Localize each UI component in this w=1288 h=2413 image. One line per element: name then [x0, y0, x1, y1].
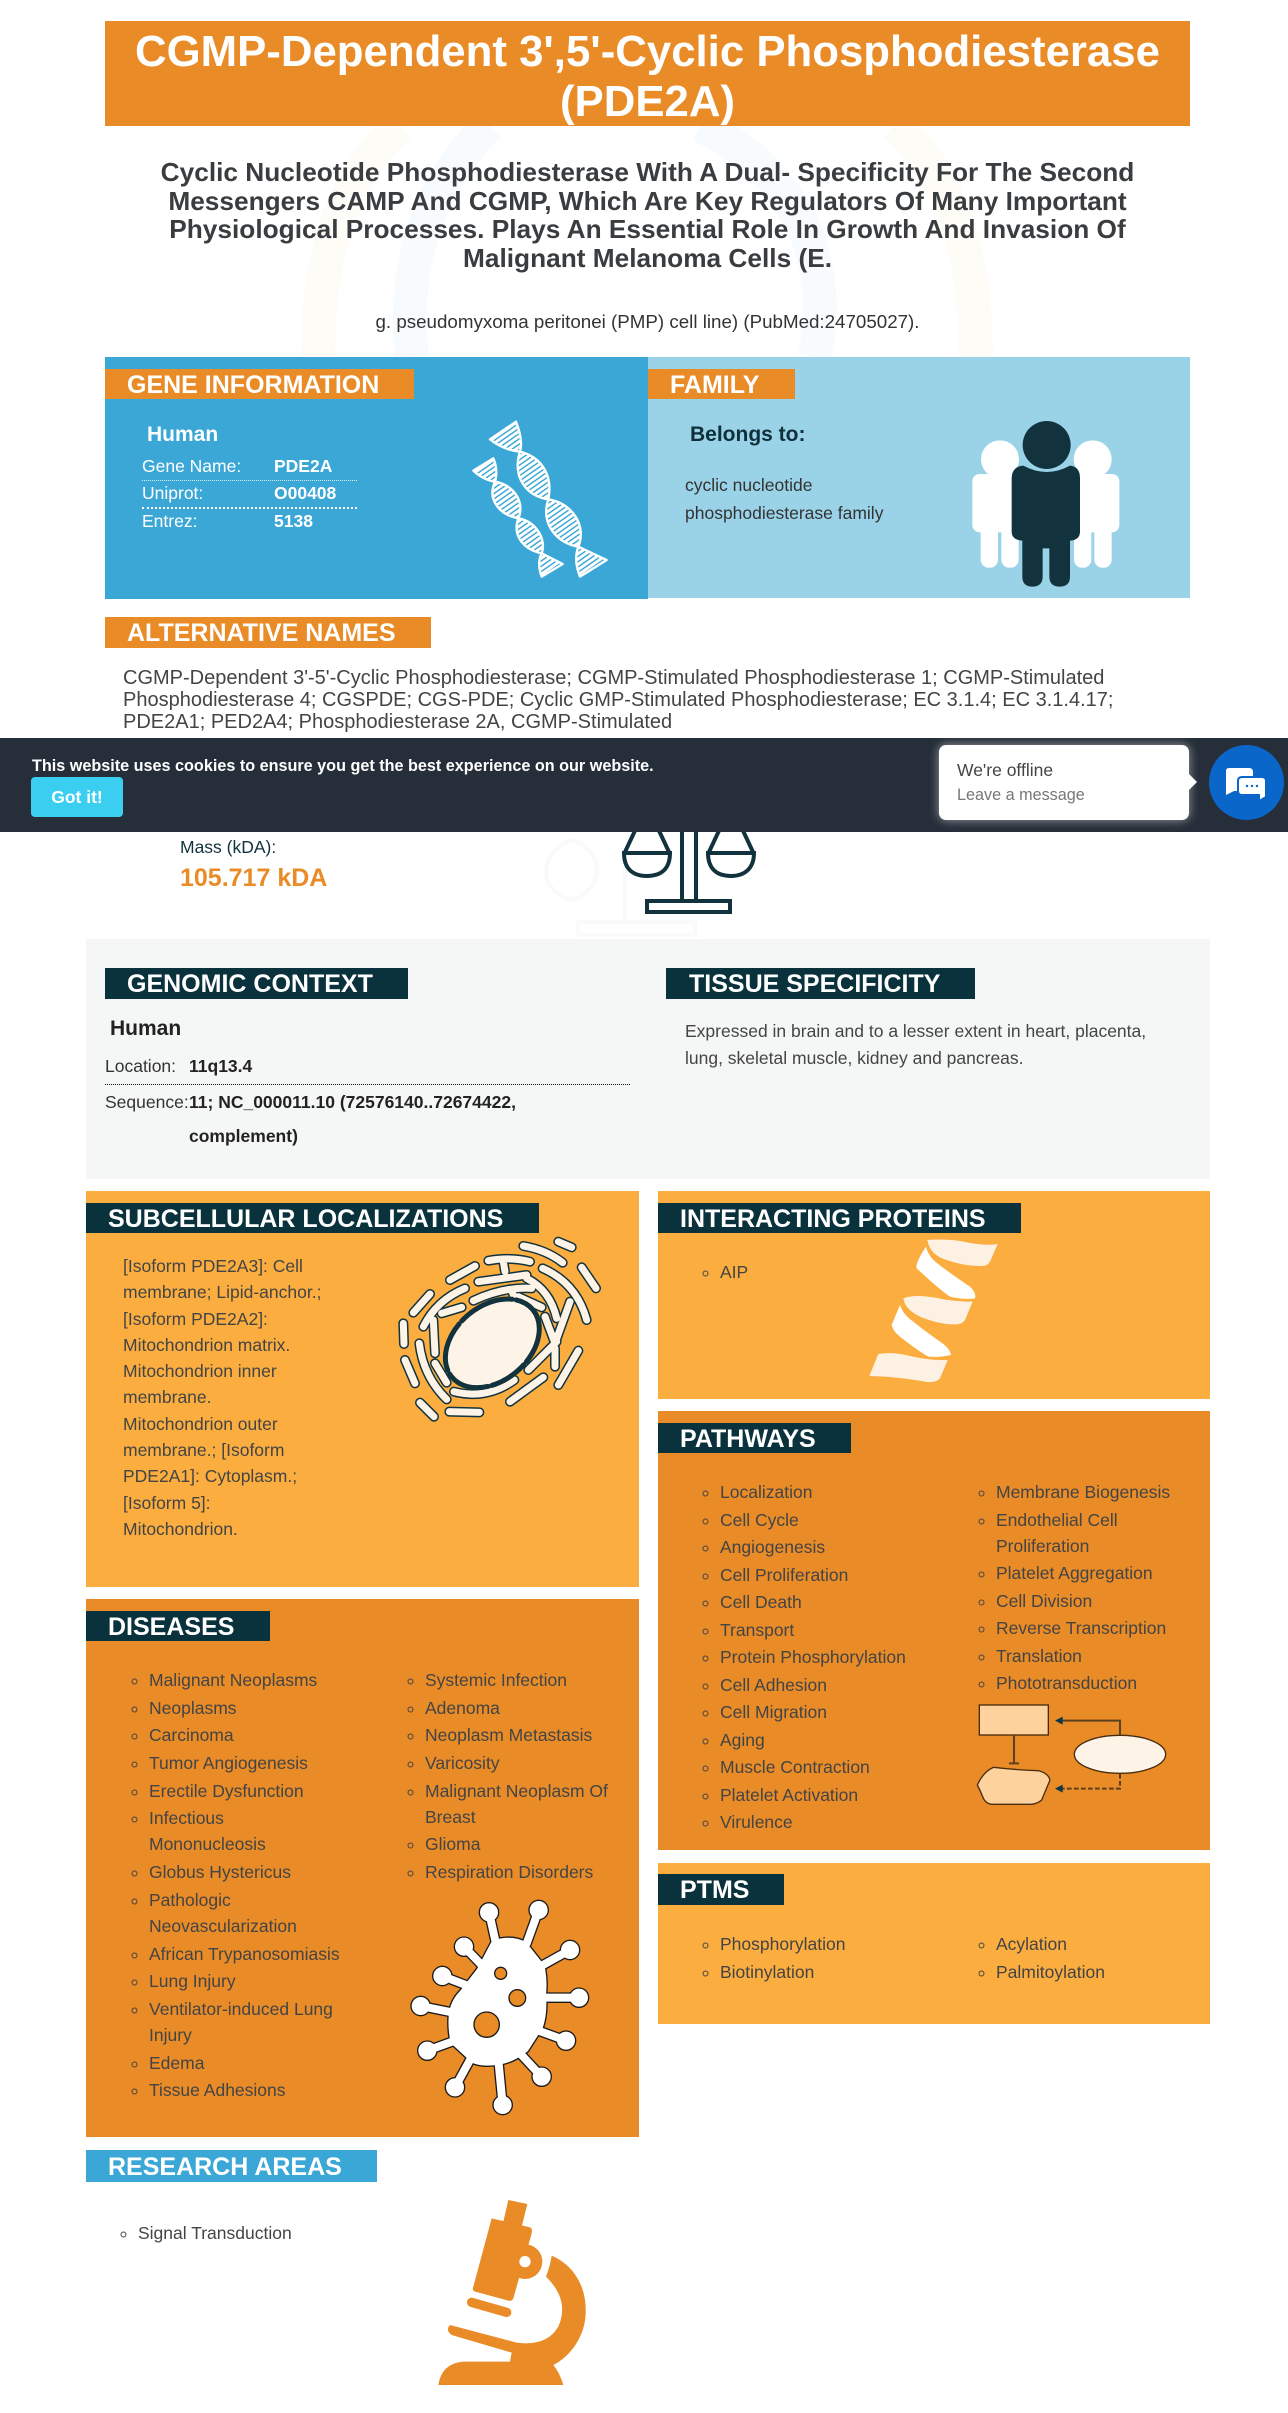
subtitle description: [161, 157, 1134, 273]
heading: PTMs: [658, 1874, 784, 1905]
heading: family: [648, 369, 795, 399]
pathways list column 1: Protein Phosphorylation: [720, 1647, 906, 1667]
diseases list column 1: [132, 1670, 340, 2100]
panel: genomic context and tissue specificity: complement): [189, 1126, 298, 1146]
diseases list column 1: Neoplasms: [149, 1698, 237, 1718]
diseases list column 2: Glioma: [425, 1834, 480, 1854]
heading: PTMs: PTMS: [680, 1876, 749, 1904]
tissue specificity text: lung, skeletal muscle, kidney and pancreas.: [685, 1048, 1024, 1068]
localization text: membrane.: [123, 1387, 212, 1407]
pathways list column 2: Cell Division: [996, 1590, 1092, 1610]
alternative names text: PDE2A1; PED2A4; Phosphodiesterase 2A, CGMP-Stimulated: [123, 711, 672, 733]
PTMs list column 1: Phosphorylation: [720, 1934, 846, 1954]
diseases list column 2: Systemic Infection: [425, 1670, 567, 1690]
PTMs list column 2: [978, 1934, 1105, 1982]
pathways list column 2: Endothelial Cell: [996, 1510, 1118, 1530]
title banner: [105, 21, 1190, 126]
subtitle description: Malignant Melanoma Cells (E.: [463, 243, 832, 273]
pathways list column 2: [978, 1482, 1170, 1693]
pathways list column 1: Cell Death: [720, 1592, 802, 1612]
diseases list column 2: Neoplasm Metastasis: [425, 1725, 592, 1745]
pathways list column 1: Cell Proliferation: [720, 1564, 848, 1584]
panel: gene information: 5138: [274, 511, 313, 531]
diseases list column 1: Neovascularization: [149, 1916, 297, 1936]
diseases list column 1: African Trypanosomiasis: [149, 1944, 340, 1964]
mass value: 105.717 kDA: [180, 864, 327, 892]
pathways list column 2: Proliferation: [996, 1536, 1089, 1556]
uniprot row: Uniprot:: [142, 483, 203, 503]
pathways list column 2: Reverse Transcription: [996, 1618, 1166, 1638]
localization text: Mitochondrion matrix.: [123, 1335, 290, 1355]
pathways list column 1: Cell Adhesion: [720, 1674, 827, 1694]
panel: genomic context and tissue specificity: [86, 939, 1210, 1179]
bubble pointer: [1189, 774, 1197, 790]
diseases list column 1: Edema: [149, 2053, 204, 2073]
diseases list column 1: Mononucleosis: [149, 1834, 266, 1854]
species label: Human: [110, 1017, 181, 1040]
diseases list column 2: Respiration Disorders: [425, 1862, 593, 1882]
pathways list column 1: [702, 1482, 906, 1832]
heading: pathways: [658, 1423, 851, 1453]
tissue specificity text: Expressed in brain and to a lesser extent in heart, placenta,: [685, 1021, 1146, 1041]
diseases list column 1: Tissue Adhesions: [149, 2080, 286, 2100]
panel: pathways: [658, 1411, 1210, 1850]
PTMs list column 1: [702, 1934, 846, 1982]
pathways list column 1: Transport: [720, 1620, 794, 1640]
chat launcher button: [1209, 745, 1284, 820]
cookie consent bar: [0, 738, 1288, 832]
heading: research areas: RESEARCH AREAS: [108, 2153, 342, 2181]
localization text: membrane.; [Isoform: [123, 1440, 284, 1460]
heading: diseases: DISEASES: [108, 1613, 234, 1641]
cookie message: This website uses cookies to ensure you get the best experience on our website.: [32, 757, 654, 775]
family description: phosphodiesterase family: [685, 503, 883, 523]
subtitle description: Cyclic Nucleotide Phosphodiesterase With A Dual- Specificity For The Second: [161, 157, 1134, 187]
diseases list column 2: Adenoma: [425, 1698, 500, 1718]
panel: gene information: PDE2A: [274, 456, 332, 476]
heading: pathways: PATHWAYS: [680, 1425, 816, 1453]
localization text: Mitochondrion.: [123, 1519, 238, 1539]
panel: subcellular localizations: [86, 1191, 638, 1587]
pathways list column 1: Cell Migration: [720, 1702, 827, 1722]
panel: PTMs: [658, 1863, 1210, 2024]
diseases list column 1: Malignant Neoplasms: [149, 1670, 317, 1690]
diseases list column 2: Breast: [425, 1807, 476, 1827]
interacting proteins list: AIP: [720, 1262, 748, 1282]
panel: gene information: O00408: [274, 483, 336, 503]
diseases list column 1: Pathologic: [149, 1890, 231, 1910]
cookie button: Got it!: [51, 787, 103, 807]
belongs to label: Belongs to:: [690, 423, 806, 446]
diseases list column 2: Malignant Neoplasm Of: [425, 1781, 608, 1801]
heading: gene information: GENE INFORMATION: [127, 371, 379, 399]
PTMs list column 2: Palmitoylation: [996, 1962, 1105, 1982]
family description: [685, 475, 884, 523]
pathways list column 1: Localization: [720, 1482, 812, 1502]
species label: Human: [147, 423, 218, 446]
localization text: [Isoform PDE2A3]: Cell: [123, 1256, 303, 1276]
icon: chat bubbles: [1226, 768, 1265, 800]
chat offline subtitle: Leave a message: [957, 786, 1085, 804]
alternative names text: [123, 667, 1113, 733]
localization text: membrane; Lipid-anchor.;: [123, 1282, 321, 1302]
chat offline title: We're offline: [957, 760, 1053, 780]
pathways list column 2: Phototransduction: [996, 1673, 1137, 1693]
gene name row: Gene Name:: [142, 456, 241, 476]
diseases list column 1: Erectile Dysfunction: [149, 1781, 304, 1801]
title banner: (PDE2A): [560, 77, 735, 126]
heading: alternative names: ALTERNATIVE NAMES: [127, 619, 396, 647]
icon: mitochondrion: [398, 1236, 601, 1422]
icon: virus: [410, 1900, 590, 2116]
icon: protein helix: [869, 1240, 998, 1382]
diseases list column 1: Globus Hystericus: [149, 1862, 291, 1882]
chat prompt bubble: [939, 745, 1189, 820]
localization text: [123, 1256, 321, 1539]
panel: interacting proteins: [658, 1191, 1210, 1399]
diseases list column 2: Varicosity: [425, 1753, 500, 1773]
family description: cyclic nucleotide: [685, 475, 812, 495]
pathways list column 1: Cell Cycle: [720, 1510, 799, 1530]
panel: genomic context and tissue specificity: 11; NC_000011.10 (72576140..72674422,: [189, 1092, 516, 1112]
diseases list column 2: [408, 1670, 608, 1882]
mass label: Mass (kDA):: [180, 837, 276, 857]
localization text: Mitochondrion inner: [123, 1361, 277, 1381]
pathways list column 1: Platelet Activation: [720, 1784, 858, 1804]
heading: genomic context: GENOMIC CONTEXT: [127, 970, 373, 998]
diseases list column 1: Infectious: [149, 1808, 224, 1828]
sequence row: Sequence:: [105, 1092, 189, 1112]
pathways list column 2: Platelet Aggregation: [996, 1563, 1153, 1583]
localization text: PDE2A1]: Cytoplasm.;: [123, 1466, 297, 1486]
tissue specificity text: [685, 1021, 1146, 1068]
diseases list column 1: Lung Injury: [149, 1971, 236, 1991]
pathways list column 1: Muscle Contraction: [720, 1757, 870, 1777]
subtitle description: Physiological Processes. Plays An Essential Role In Growth And Invasion Of: [169, 214, 1126, 244]
heading: family: FAMILY: [670, 371, 759, 399]
heading: diseases: [86, 1611, 270, 1641]
entrez row: Entrez:: [142, 511, 197, 531]
PTMs list column 1: Biotinylation: [720, 1962, 814, 1982]
pathways list column 2: Membrane Biogenesis: [996, 1482, 1170, 1502]
localization text: [Isoform PDE2A2]:: [123, 1309, 268, 1329]
panel: genomic context and tissue specificity: 11q13.4: [189, 1056, 252, 1076]
pathways list column 2: Translation: [996, 1646, 1082, 1666]
icon: DNA helices: [472, 420, 608, 578]
panel: family: [648, 357, 1190, 598]
diseases list column 1: Tumor Angiogenesis: [149, 1753, 308, 1773]
localization text: [Isoform 5]:: [123, 1493, 211, 1513]
cookie button: [31, 777, 123, 817]
heading: subcellular localizations: SUBCELLULAR LOCALIZATIONS: [108, 1205, 503, 1233]
diseases list column 1: Carcinoma: [149, 1725, 234, 1745]
pathways list column 1: Aging: [720, 1730, 765, 1750]
heading: interacting proteins: INTERACTING PROTEINS: [680, 1205, 986, 1233]
icon: group of people: [972, 421, 1120, 587]
diseases list column 1: Ventilator-induced Lung: [149, 1999, 333, 2019]
icon: microscope: [438, 2200, 586, 2385]
pathways list column 1: Angiogenesis: [720, 1537, 825, 1557]
icon: balance scale: [622, 832, 756, 914]
icon: pathway diagram: [976, 1704, 1166, 1805]
location row: Location:: [105, 1056, 176, 1076]
PTMs list column 2: Acylation: [996, 1934, 1067, 1954]
pathways list column 1: Virulence: [720, 1812, 793, 1832]
alternative names text: CGMP-Dependent 3'-5'-Cyclic Phosphodiesterase; CGMP-Stimulated Phosphodiesterase 1; CGMP-Stimulated: [123, 667, 1104, 689]
alternative names text: Phosphodiesterase 4; CGSPDE; CGS-PDE; Cyclic GMP-Stimulated Phosphodiesterase; EC 3.1.4; EC 3.1.4.17;: [123, 689, 1113, 711]
diseases list column 1: Injury: [149, 2025, 192, 2045]
localization text: Mitochondrion outer: [123, 1414, 278, 1434]
panel: diseases: [86, 1599, 638, 2137]
description continuation: g. pseudomyxoma peritonei (PMP) cell line) (PubMed:24705027).: [375, 311, 920, 332]
subtitle description: Messengers CAMP And CGMP, Which Are Key Regulators Of Many Important: [168, 186, 1127, 216]
panel: gene information: [105, 357, 648, 599]
research areas list: Signal Transduction: [138, 2223, 292, 2243]
title banner: CGMP-Dependent 3',5'-Cyclic Phosphodiesterase: [135, 27, 1160, 76]
heading: tissue specificity: TISSUE SPECIFICITY: [689, 970, 940, 998]
